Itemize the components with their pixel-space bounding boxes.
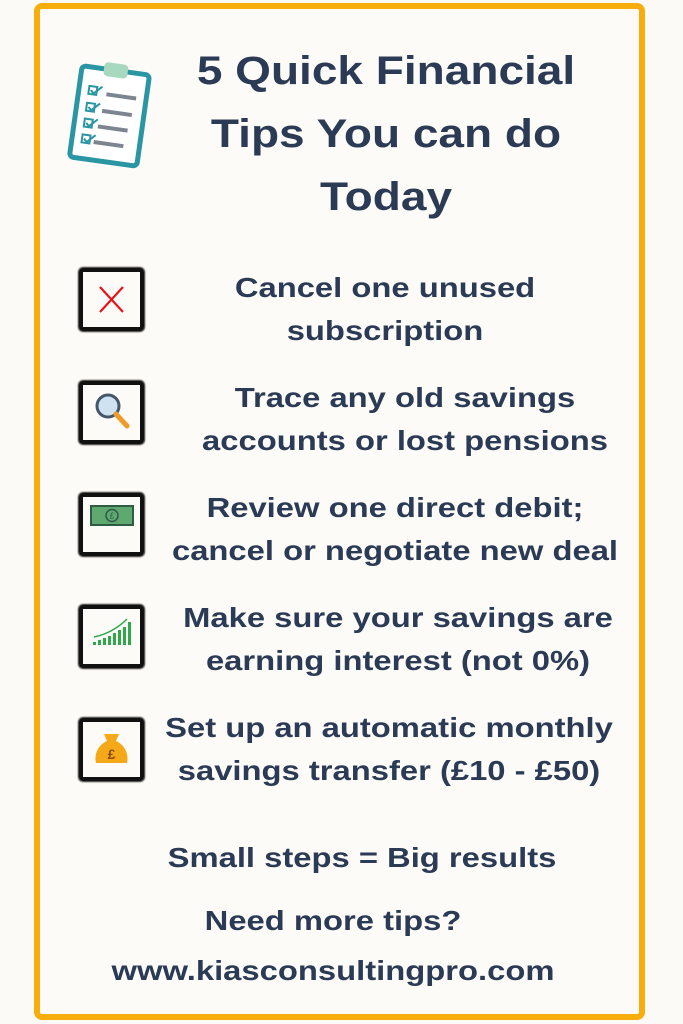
icon: clipboard [67, 62, 152, 168]
tip 1: Cancel one unused [235, 272, 535, 303]
title: Today [320, 175, 452, 219]
tip 4: earning interest (not 0%) [206, 645, 590, 676]
title: 5 Quick Financial [197, 49, 575, 93]
tip 2: Trace any old savings [235, 382, 575, 413]
tip 3: Review one direct debit; [207, 492, 583, 523]
tip 4: Make sure your savings are [183, 602, 613, 633]
tip 2 [202, 382, 608, 456]
icon: growth chart box [79, 605, 144, 668]
tip 3: cancel or negotiate new deal [172, 535, 618, 566]
title [197, 49, 575, 219]
icon: banknote box: £ [110, 512, 115, 520]
tip 4 [183, 602, 613, 676]
tip 5: savings transfer (£10 - £50) [178, 755, 600, 786]
tagline: Small steps = Big results [168, 842, 556, 873]
icon: banknote box [79, 493, 144, 556]
tip 1: subscription [287, 315, 483, 346]
call to action [111, 905, 554, 986]
tip 5 [165, 712, 613, 786]
title: Tips You can do [211, 112, 561, 156]
call to action: www.kiasconsultingpro.com [112, 955, 554, 986]
tip 3 [172, 492, 618, 566]
icon: magnifier box [79, 381, 144, 444]
tip 5: Set up an automatic monthly [165, 712, 613, 743]
tip 2: accounts or lost pensions [202, 425, 608, 456]
icon: cancel box [79, 268, 144, 331]
icon: money bag box: £ [108, 746, 116, 762]
call to action: Need more tips? [205, 905, 461, 936]
tip 1 [235, 272, 535, 346]
icon: money bag box [79, 718, 144, 781]
